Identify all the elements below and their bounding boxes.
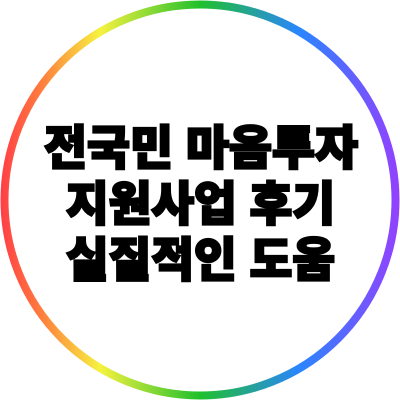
title line 2: 지원사업 후기: [66, 178, 335, 230]
title line 1: 전국민 마음투자: [44, 122, 358, 174]
title: [44, 122, 358, 286]
title line 3: 실질적인 도움: [66, 234, 335, 286]
